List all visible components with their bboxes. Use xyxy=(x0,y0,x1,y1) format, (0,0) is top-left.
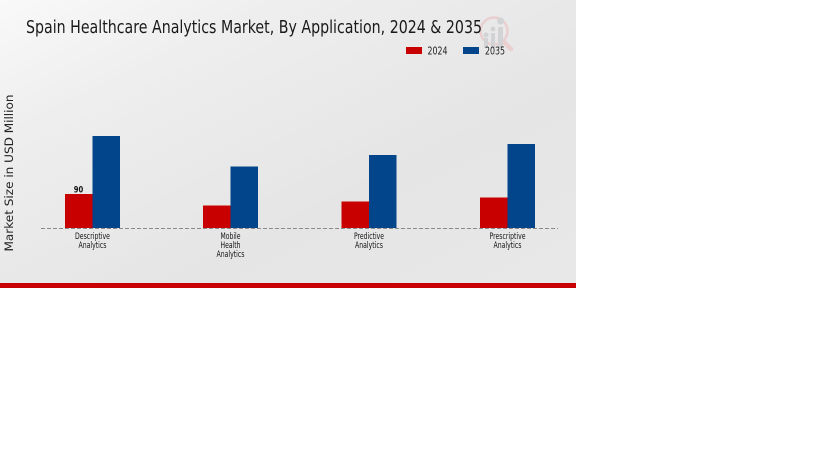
bars: Descriptive Analytics xyxy=(65,136,120,228)
category label: Predictive Analytics: Predictive xyxy=(354,232,384,242)
category label: Mobile Health Analytics xyxy=(216,232,245,260)
category label: Mobile Health Analytics: Analytics xyxy=(216,250,245,260)
legend item: 2024: 2024 xyxy=(428,44,448,58)
category label: Prescriptive Analytics xyxy=(490,232,526,251)
bars: Prescriptive Analytics xyxy=(480,144,535,228)
bars: Predictive Analytics xyxy=(342,155,396,228)
category label: Mobile Health Analytics: Mobile xyxy=(220,232,240,242)
category label: Descriptive Analytics: Descriptive xyxy=(75,232,110,242)
category label: Descriptive Analytics xyxy=(75,232,110,251)
value label: 90 xyxy=(74,186,83,196)
footer bar xyxy=(0,283,576,288)
y axis label: Market Size in USD Million xyxy=(2,94,16,252)
category label: Predictive Analytics xyxy=(354,232,384,251)
category label: Prescriptive Analytics: Prescriptive xyxy=(490,232,526,242)
category label: Descriptive Analytics: Analytics xyxy=(78,241,107,251)
legend item: 2035: 2035 xyxy=(485,44,505,58)
category label: Predictive Analytics: Analytics xyxy=(355,241,383,251)
panel: chart background xyxy=(0,0,576,283)
icon: watermark magnifier xyxy=(480,18,511,49)
category label: Mobile Health Analytics: Health xyxy=(220,241,240,251)
bars: Mobile Health Analytics xyxy=(203,166,258,228)
baseline xyxy=(41,228,558,230)
legend xyxy=(406,44,505,58)
category label: Prescriptive Analytics: Analytics xyxy=(494,241,522,251)
title: Spain Healthcare Analytics Market, By Application, 2024 & 2035 xyxy=(26,17,482,38)
